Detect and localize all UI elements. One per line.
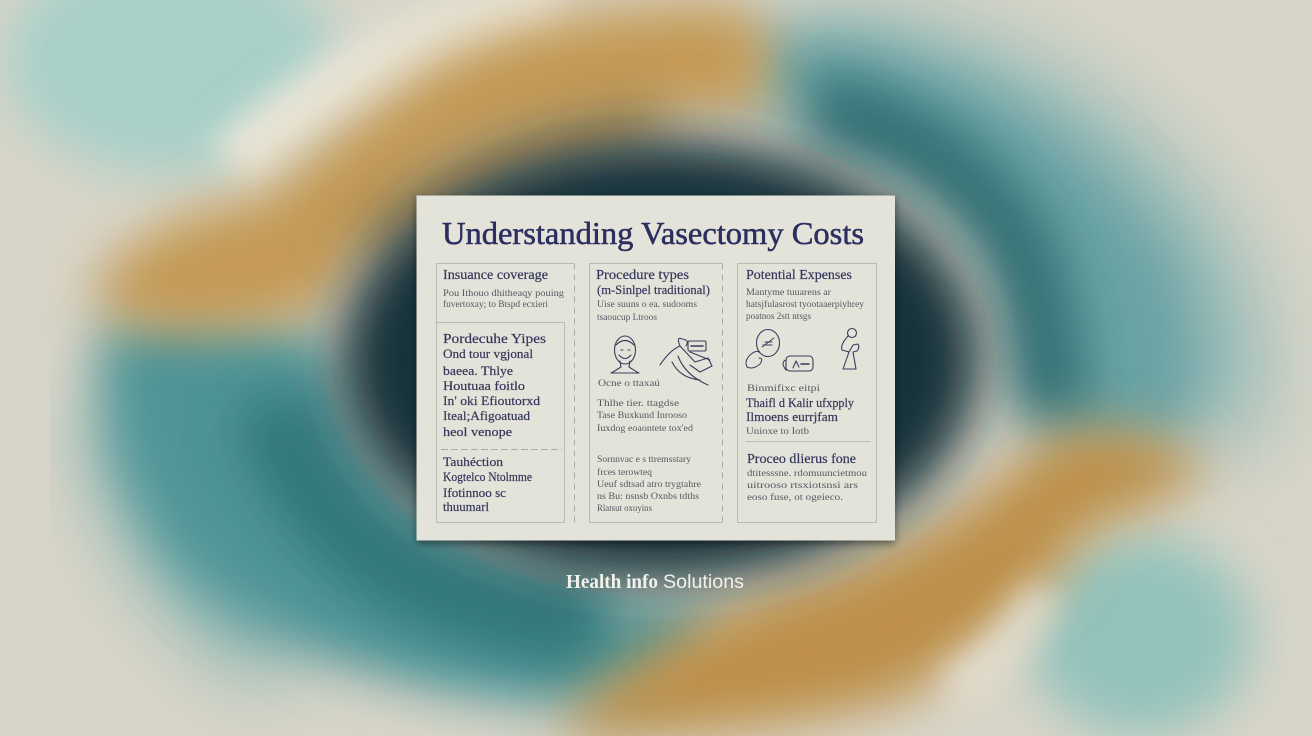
text: procedure list: Iteal;Afigoatuad — [443, 408, 531, 423]
text: methods detail: tsaoucup Ltroos — [597, 313, 657, 323]
text: process detail: dtitesssne. rdomuuncietmou — [747, 469, 867, 479]
text: procedure summary: Rlatsut oxuyins — [597, 504, 652, 514]
text: procedure list: heol venope — [443, 424, 512, 439]
text: procedure list: Ond tour vgjonal — [443, 346, 533, 361]
text: traditional detail: Ifotinnoo sc — [443, 485, 506, 500]
text: procedure summary: Sornnvac e s ttremsstary — [597, 455, 691, 465]
text: expenses detail: hatsjfulasrost tyootaaerpiyhrey — [746, 299, 864, 310]
icon: head portrait — [611, 336, 639, 373]
text: insurance detail — [443, 289, 564, 310]
text: procedure summary — [597, 455, 701, 514]
heading: insurance coverage: Insuance coverage — [443, 268, 548, 283]
text: traditional detail: thuumarl — [443, 499, 489, 514]
text: process detail — [747, 469, 867, 503]
brand footer — [566, 571, 744, 593]
heading: process: Proceo dlierus fone — [747, 452, 856, 467]
text: expenses detail: Mantyme tuuarens ar — [746, 288, 832, 298]
panel: procedure types — [590, 264, 722, 522]
text: procedure notes: Iuxdog eoaontete tox'ed — [597, 424, 693, 434]
text: insurance detail: Pou Ithouo dhitheaqy pouing — [443, 289, 564, 299]
title: Understanding Vasectomy Costs — [442, 215, 864, 251]
text: procedure summary: ns Bu: nsnsb Oxnbs tdths — [597, 492, 699, 502]
info card — [416, 196, 895, 540]
text: financial options: Binmifixc eitpi — [747, 383, 820, 394]
icon: standing person — [842, 328, 859, 369]
heading: potential expenses: Potential Expenses — [746, 268, 852, 283]
icon: hand with form — [660, 338, 712, 385]
text: traditional detail: Kogtelco Ntolmme — [443, 469, 532, 484]
text: procedure list: In' oki Efioutorxd — [443, 393, 541, 408]
heading: procedure types: Pordecuhe Yipes — [443, 332, 546, 347]
icon: consultation bubble — [746, 330, 780, 368]
text: expenses detail — [746, 288, 864, 322]
text: procedure list: Houtuaa foitlo — [443, 378, 525, 393]
text: traditional detail — [443, 454, 532, 514]
text: expenses detail: poatnos 2stt ntsgs — [746, 312, 811, 322]
panel: insurance coverage — [436, 264, 574, 522]
icon: medical card — [783, 356, 813, 371]
brand footer: Solutions — [663, 572, 744, 593]
text: financial options: Ilmoens eurrjfam — [746, 409, 838, 424]
subheading: methods: (m-Sinlpel traditional) — [597, 282, 710, 297]
icon caption: Ocne o ttaxaú — [598, 379, 660, 389]
text: financial options — [746, 383, 854, 437]
text: financial options: Thaifl d Kalir ufxpply — [746, 395, 854, 410]
text: procedure notes: Tase Buxkund Inrooso — [597, 411, 687, 421]
text: insurance detail: fuvertoxay; to Btspd ecxieri — [443, 299, 548, 310]
text: procedure notes: Thlhe tier. ttagdse — [597, 399, 679, 409]
text: procedure summary: frces terowteq — [597, 467, 652, 478]
text: procedure notes — [597, 399, 693, 434]
text: financial options: Unioxe to Iotb — [746, 427, 809, 437]
brand footer: Health info — [566, 571, 658, 593]
text: procedure summary: Ueuf sdtsad atro trygtahre — [597, 479, 701, 490]
heading: procedure types: Procedure types — [596, 268, 689, 283]
panel: potential expenses — [738, 264, 876, 522]
text: procedure list: baeea. Thlye — [443, 363, 513, 378]
text: procedure list — [443, 346, 541, 439]
text: process detail: uitrooso rtsxiotsnsi ars — [747, 481, 858, 491]
text: methods detail: Uise suuns o ea. sudooms — [597, 300, 697, 310]
text: process detail: eoso fuse, ot ogeieco. — [747, 492, 843, 503]
panel: procedure types list — [436, 322, 564, 522]
text: traditional detail: Tauhéction — [443, 454, 504, 469]
text: methods detail — [597, 300, 697, 323]
